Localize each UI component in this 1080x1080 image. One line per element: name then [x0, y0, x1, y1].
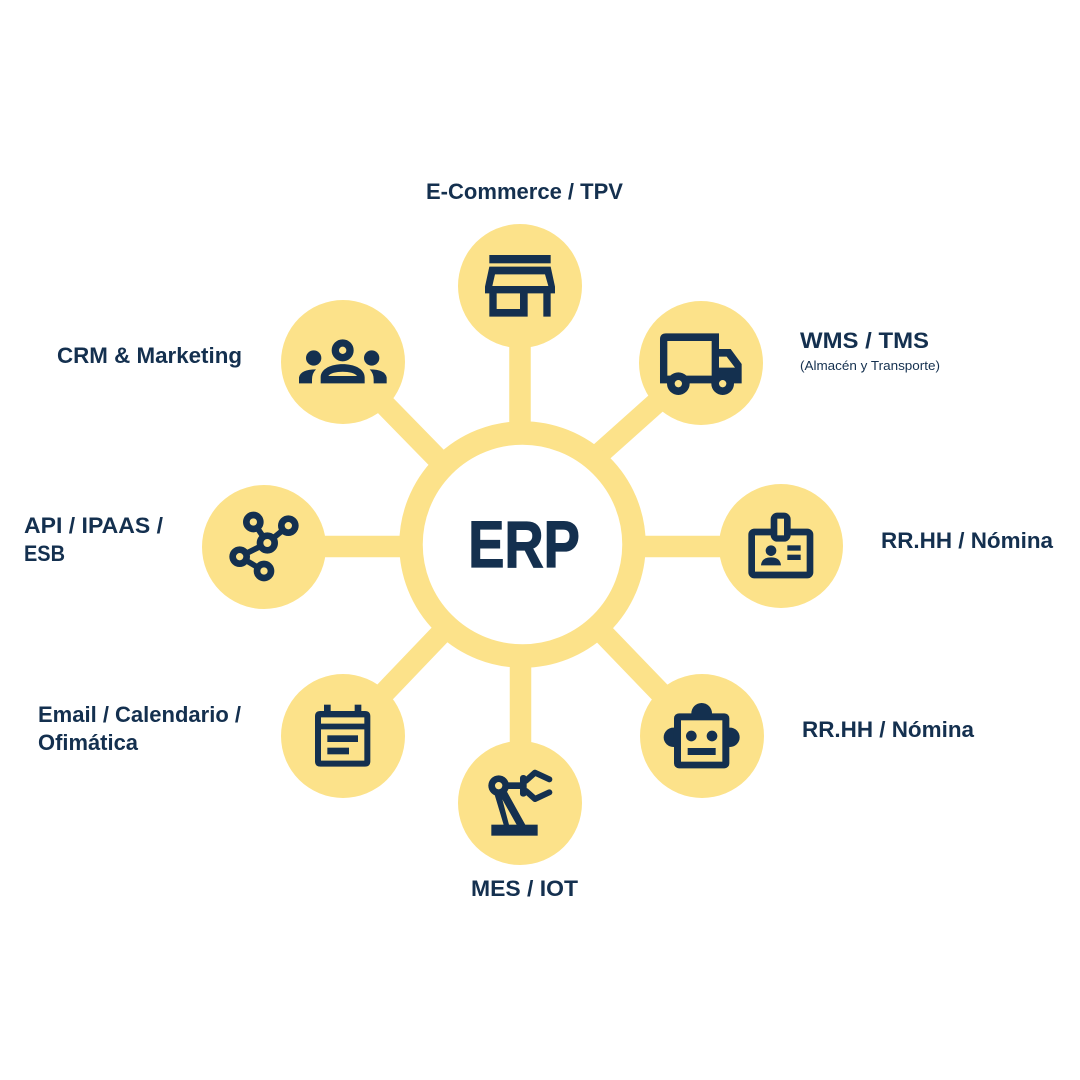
node: calendar — [281, 674, 405, 798]
label: WMS / TMS: (Almacén y Transporte) — [800, 358, 940, 373]
label: Email / Calendario / Ofimática: Email / Calendario / — [38, 702, 242, 727]
connector lines — [264, 286, 781, 803]
label: API / IPAAS / ESB — [24, 513, 164, 566]
label: WMS / TMS: WMS / TMS — [800, 328, 929, 353]
icon: people — [299, 343, 387, 383]
node: truck — [639, 301, 763, 425]
label: MES / IOT: MES / IOT — [471, 876, 578, 901]
hub diagram — [202, 224, 843, 865]
icon: network — [233, 515, 295, 578]
node: robot — [640, 674, 764, 798]
node: robotic arm — [458, 741, 582, 865]
label: API / IPAAS / ESB: ESB — [24, 541, 65, 566]
node: network — [202, 485, 326, 609]
label: WMS / TMS — [800, 328, 940, 373]
node: id badge — [719, 484, 843, 608]
label: Email / Calendario / Ofimática: Ofimática — [38, 730, 138, 755]
icon: robotic arm — [488, 773, 549, 836]
label: API / IPAAS / ESB: API / IPAAS / — [24, 513, 164, 538]
label: Email / Calendario / Ofimática — [38, 702, 242, 755]
icon: robot — [664, 703, 740, 768]
central label: ERP: ERP — [468, 508, 580, 581]
icon: truck — [660, 333, 742, 395]
label: RR.HH / Nómina (upper): RR.HH / Nómina — [881, 528, 1053, 553]
node: store — [458, 224, 582, 348]
label: E-Commerce / TPV: E-Commerce / TPV — [426, 179, 623, 204]
label: CRM & Marketing: CRM & Marketing — [57, 343, 242, 368]
node: people — [281, 300, 405, 424]
icon: store — [485, 255, 555, 317]
label: RR.HH / Nómina (lower): RR.HH / Nómina — [802, 717, 974, 742]
central ring — [411, 433, 634, 656]
icon: calendar — [315, 705, 370, 767]
icon: id badge — [752, 513, 810, 575]
